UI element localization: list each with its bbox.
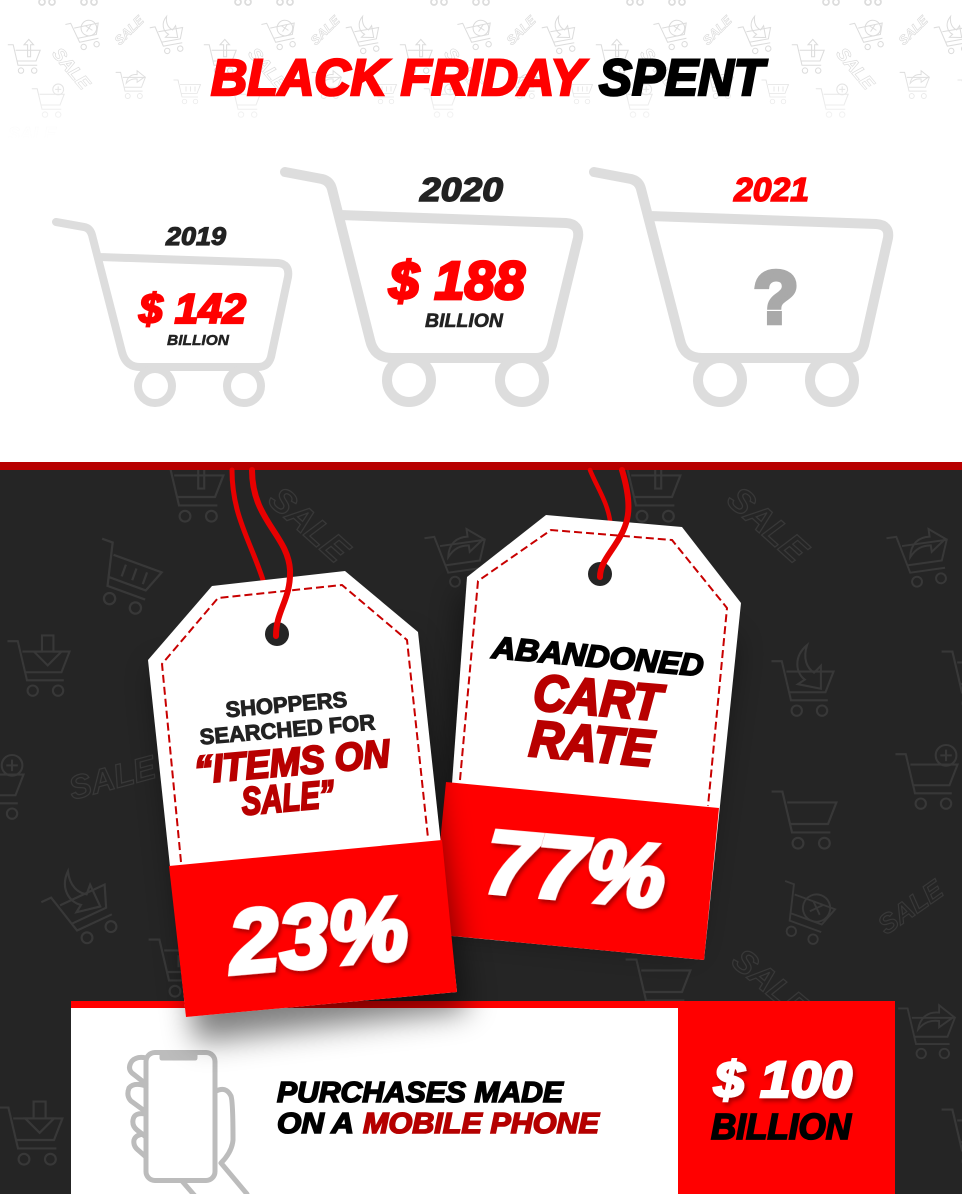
red base — [431, 782, 719, 960]
label: rate: RATE — [527, 710, 658, 778]
label: items on: “ITEMS ON — [192, 733, 392, 793]
icon: 2020 cart — [285, 172, 578, 402]
billion label: BILLION — [425, 311, 504, 332]
text: SALE — [872, 874, 949, 940]
text: SALE — [65, 748, 160, 807]
red divider — [0, 462, 962, 470]
tag shadow — [155, 640, 468, 1042]
short string — [590, 470, 611, 530]
billion label: BILLION — [167, 332, 230, 349]
text: purchases made: PURCHASES MADE — [277, 1077, 565, 1109]
amount: 100 billion: $ 100 — [713, 1051, 852, 1108]
icon: hand holding phone — [128, 1052, 247, 1194]
label: sale: SALE” — [240, 773, 336, 824]
title: BLACK FRIDAY — [211, 49, 588, 106]
text: on a mobile phone: MOBILE PHONE — [363, 1108, 601, 1140]
title: SPENT — [599, 49, 768, 106]
tag body — [441, 515, 741, 960]
hole — [265, 622, 289, 646]
value: 77%: 77% — [482, 812, 670, 928]
stitching — [460, 530, 727, 806]
panel: 2021 cart — [594, 171, 888, 402]
question mark: ? — [753, 256, 799, 339]
text: SALE — [111, 12, 147, 48]
amount 142: $ 142 — [138, 285, 246, 332]
text: SALE — [8, 124, 57, 144]
amount: 100 billion — [711, 1051, 852, 1147]
panel: 2019 cart — [56, 222, 288, 403]
icon: 2021 cart — [594, 172, 888, 402]
text: SALE — [720, 479, 816, 572]
amount 188: $ 188 — [388, 251, 525, 311]
dark background section — [0, 470, 962, 1194]
main string — [252, 470, 290, 636]
panel: mobile purchases — [71, 1001, 895, 1194]
text: on a mobile phone — [277, 1108, 601, 1140]
tag: items on sale — [148, 470, 457, 1017]
tag body — [148, 571, 457, 1017]
text: SALE — [725, 941, 817, 1026]
label: shoppers: SHOPPERS — [224, 687, 348, 722]
amount: 100 billion: BILLION — [711, 1106, 852, 1147]
year 2019: 2019 — [165, 223, 226, 251]
text: SALE — [261, 479, 358, 572]
panel top stripe — [71, 1001, 895, 1008]
hole — [588, 562, 612, 586]
label: cart: CART — [531, 664, 667, 732]
tag shadow — [430, 590, 735, 950]
text: SALE — [48, 44, 95, 94]
panel: 2020 cart — [285, 171, 578, 402]
red base — [169, 840, 457, 1017]
year 2020: 2020 — [419, 171, 504, 208]
text: on a mobile phone: ON A — [277, 1108, 354, 1140]
label: abandoned: ABANDONED — [490, 630, 705, 683]
background: white header — [0, 0, 962, 462]
stitching — [162, 585, 428, 862]
label: searched for: SEARCHED FOR — [199, 709, 376, 750]
tag: abandoned cart rate — [431, 470, 741, 960]
main string — [600, 470, 628, 577]
panel red area — [678, 1008, 895, 1194]
short string — [232, 470, 263, 580]
year 2021: 2021 — [733, 171, 809, 208]
icon: 2019 cart — [56, 222, 288, 403]
value: 23%: 23% — [223, 879, 412, 994]
title — [211, 49, 768, 106]
panel white area — [71, 1008, 678, 1194]
